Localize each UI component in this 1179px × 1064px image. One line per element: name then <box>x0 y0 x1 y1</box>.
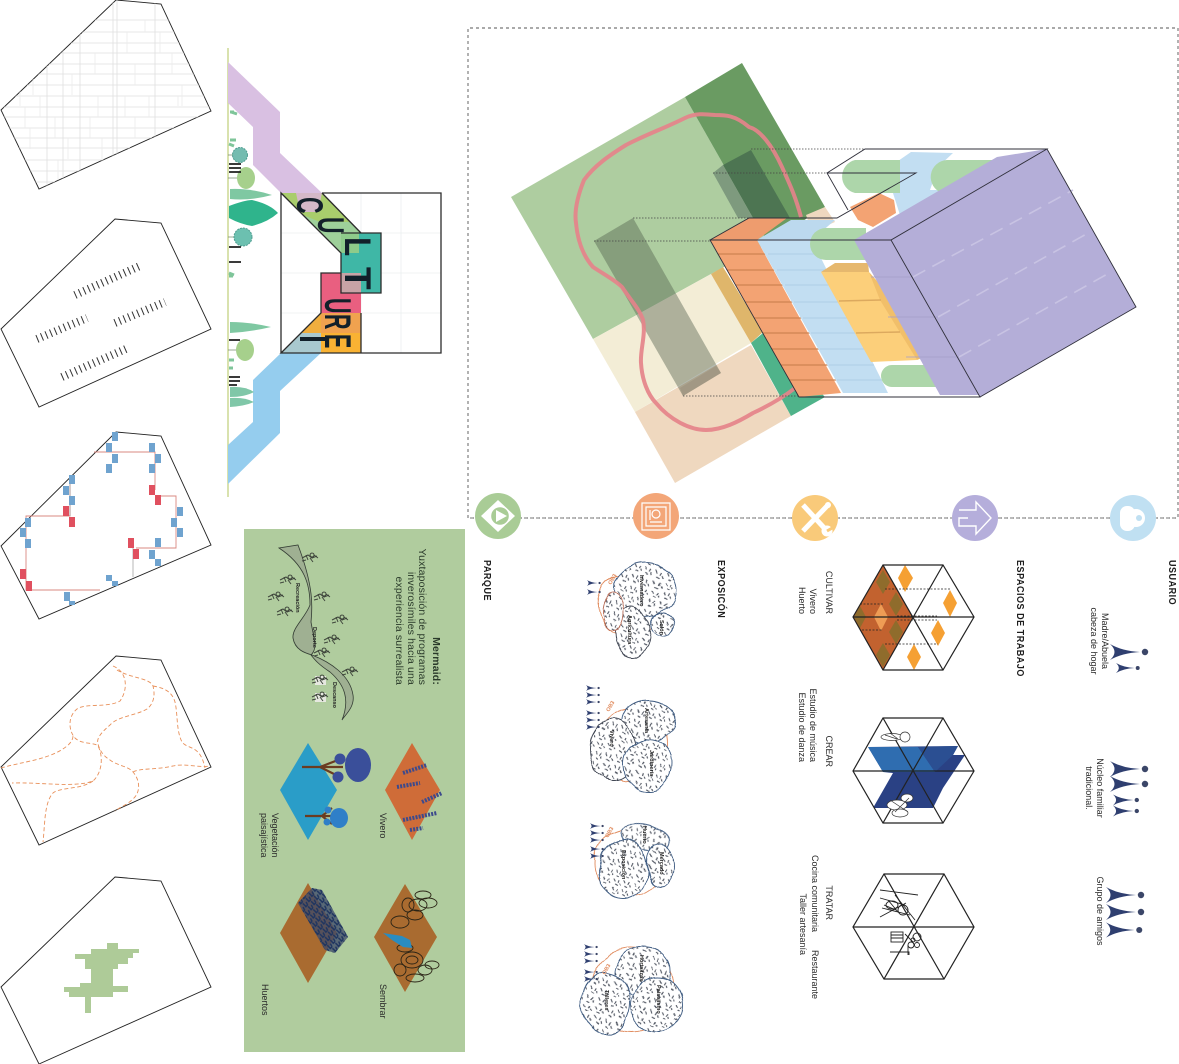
culture lettering <box>289 197 378 348</box>
label: Vegetación paisajística: paisajística <box>259 813 269 858</box>
heading: ESPACIOS DE TRABAJO: ESPACIOS DE TRABAJO <box>1014 560 1026 677</box>
ground: yellow strip <box>711 267 763 343</box>
ground: dark green <box>685 63 825 243</box>
frame <box>281 193 441 353</box>
green diagonal band <box>281 193 361 253</box>
dotted projection lines <box>594 149 865 396</box>
panel: Mermaid green panel <box>244 529 465 1052</box>
diagram: mermaid curve: Deporte <box>311 627 317 648</box>
cluster: exposición diagram 1 <box>587 563 676 658</box>
icon: user circle <box>1110 495 1156 541</box>
cluster: exposición diagram 1: OB3 <box>608 573 618 586</box>
purple band <box>228 62 322 193</box>
icon: arrow circle <box>952 495 998 541</box>
hexagon: tratar <box>853 874 974 979</box>
orange block <box>321 313 361 333</box>
cluster: exposición diagram 3 <box>590 819 674 900</box>
text: Mermaid description: inverosímiles hacia una <box>405 572 417 685</box>
ground: cream <box>593 274 751 412</box>
figure: craft workshop <box>890 932 921 955</box>
cluster: exposición diagram 3: OB3 <box>605 826 615 839</box>
label: cultivar: Huerto <box>797 587 807 614</box>
heading: EXPOSICÓN: EXPOSICÓN <box>715 560 728 618</box>
teal block <box>341 233 381 293</box>
text: Mermaid description <box>393 549 442 685</box>
culture lettering: U <box>310 217 352 234</box>
hexagon: crear <box>853 718 974 823</box>
diagram: mermaid curve: Recreación <box>294 583 300 613</box>
label: crear: CREAR <box>824 735 834 767</box>
ground: teal strip <box>751 333 825 416</box>
label: crear <box>797 688 834 767</box>
label: tratar: TRATAR <box>824 885 834 920</box>
icon: exposición circle <box>633 493 679 539</box>
cluster: exposición diagram 2: Jardinería <box>648 750 654 777</box>
upper blue volume <box>875 152 960 215</box>
upper green pills <box>842 160 993 193</box>
label: cultivar: CULTIVAR <box>824 571 834 615</box>
ground: light green <box>511 97 768 339</box>
culture lettering: E <box>316 334 357 348</box>
ground line <box>227 48 229 497</box>
culture lettering: T <box>337 267 378 290</box>
heading: USUARIO: USUARIO <box>1166 560 1178 605</box>
cluster: exposición diagram 2: Artesanía <box>643 708 649 734</box>
icon: Vivero diamond <box>385 743 442 840</box>
users: friends group: Grupo de amigos <box>1095 876 1105 946</box>
plot: dashed circulation paths site plan <box>1 656 211 845</box>
axonometric: site and building <box>511 63 1136 483</box>
cluster: exposición diagram 3: Exposición <box>620 850 626 880</box>
figure: musician <box>881 732 910 742</box>
label: tratar: Restaurante <box>810 950 820 999</box>
culture lettering: R <box>316 314 357 330</box>
cluster: exposición diagram 4: Hortalizas <box>638 955 644 981</box>
icon: Huertos diamond <box>280 883 348 983</box>
cluster: exposición diagram 2: Vivero <box>608 730 614 747</box>
figure: dancer <box>887 794 913 817</box>
axis: dotted timeline <box>470 517 1178 519</box>
icon: tools circle <box>792 495 838 541</box>
cluster: exposición diagram 2: OB3 <box>606 700 616 713</box>
label: tratar: Cocina comunitaria <box>810 855 820 932</box>
icon: parque circle <box>475 493 521 539</box>
plot: column rows site plan <box>1 219 211 407</box>
users: traditional family: Núcleo familiar <box>1095 758 1105 818</box>
cluster: exposición diagram 3: Mercado <box>658 852 664 875</box>
label: Vegetación paisajística: Vegetación <box>270 813 280 858</box>
users: traditional family: tradicional. <box>1084 766 1094 810</box>
purple volume <box>854 149 1136 397</box>
path: pink walkway <box>575 114 801 430</box>
text: Mermaid description: Yuxtaposición de programas <box>416 549 428 685</box>
building wireframe <box>710 149 1136 397</box>
users: friends group <box>1095 876 1144 946</box>
cluster: exposición diagram 1: Invernadero <box>638 575 644 607</box>
hexagon: cultivar <box>853 565 974 670</box>
label: tratar <box>798 855 834 999</box>
diagram: mermaid curve <box>268 545 358 720</box>
lower triangle <box>281 333 321 353</box>
label: Vegetación paisajística <box>259 813 280 858</box>
text: Mermaid description: Mermaid: <box>430 637 442 685</box>
icon: landscape vegetation diamond <box>280 743 371 840</box>
cluster: exposición diagram 1: Agricultura <box>626 615 632 645</box>
label: Vivero: Vivero <box>378 813 388 838</box>
plot: green park patch site plan <box>1 877 211 1064</box>
diagram: mermaid curve: Descanso <box>331 682 337 709</box>
yellow blocks <box>821 263 922 362</box>
blue band <box>228 353 321 484</box>
text: Mermaid description: experiencia surrealista <box>393 576 405 685</box>
users: mother and child <box>1089 607 1148 675</box>
culture lettering: L <box>336 237 377 256</box>
faint grid <box>281 193 441 353</box>
users: traditional family <box>1084 758 1148 818</box>
culture lettering: C <box>289 197 331 214</box>
users: mother and child: Madre/Abuela <box>1100 613 1110 669</box>
cluster: exposición diagram 4: OB3 <box>602 963 612 976</box>
grey block far <box>713 150 790 218</box>
trees <box>228 112 278 407</box>
ground: peach <box>635 345 791 483</box>
users: mother and child: cabeza de hogar <box>1089 607 1099 675</box>
cluster: exposición diagram 2 <box>586 685 676 791</box>
label: Huertos: Huertos <box>260 984 270 1016</box>
blue slatted strip <box>757 220 888 393</box>
plot: brick grid site plan <box>0 0 212 190</box>
label: Sembrar: Sembrar <box>378 984 388 1019</box>
green pills <box>810 228 936 387</box>
label: tratar: Taller artesanía <box>798 893 808 955</box>
pink block <box>321 273 361 313</box>
cluster: exposición diagram 4: Paisajismo <box>655 985 661 1014</box>
heading: PARQUE: PARQUE <box>481 560 493 601</box>
label: cultivar <box>797 571 834 615</box>
upper orange volume <box>850 193 896 227</box>
orange slatted strip <box>710 218 841 397</box>
icon: Sembrar diamond <box>374 884 439 992</box>
label: crear: Estudio de música <box>808 688 818 762</box>
label: cultivar: Vivero <box>808 589 818 614</box>
cluster: exposición diagram 4 <box>582 944 683 1034</box>
plot: blue and red access points site plan <box>1 432 211 619</box>
cluster: exposición diagram 4: Talleres <box>603 990 609 1010</box>
panel: culture section diagram <box>228 48 441 497</box>
cluster: exposición diagram 3: Huerto <box>641 826 647 844</box>
label: crear: Estudio de danza <box>797 692 807 762</box>
frame: dashed drawing boundary <box>468 28 1178 518</box>
figure: kitchen scene <box>880 890 918 920</box>
culture lettering: U <box>316 298 357 313</box>
grey block near <box>594 218 721 396</box>
cluster: exposición diagram 1: Salón <box>658 620 664 636</box>
